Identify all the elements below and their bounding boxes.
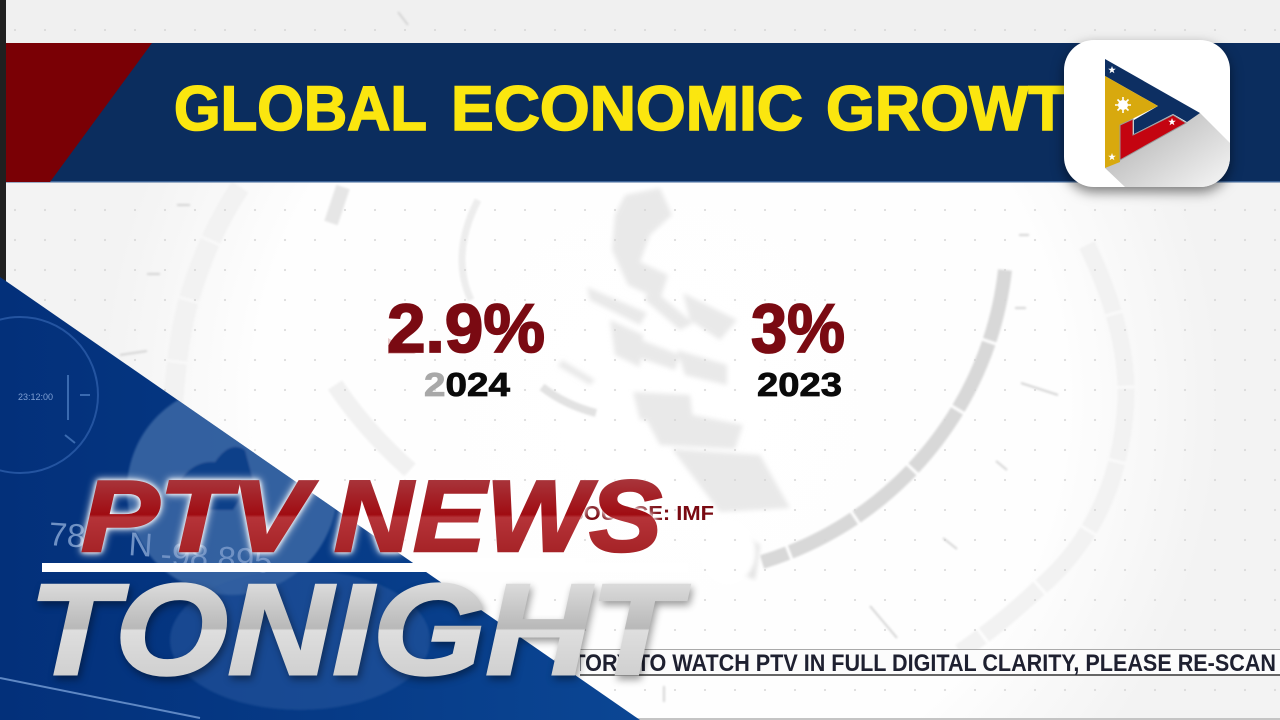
white island glow — [700, 520, 756, 584]
white rule — [42, 563, 688, 572]
stars — [1108, 66, 1176, 160]
PTV triangle emblem — [1105, 59, 1200, 168]
TONIGHT wordmark: TONIGHT — [29, 558, 689, 702]
data lines — [0, 678, 200, 718]
title banner — [6, 43, 1280, 182]
banner heading: ECONOMIC — [451, 74, 803, 144]
coordinates text: 78 — [48, 515, 87, 555]
coordinates text — [51, 522, 271, 572]
pink fade on digit — [388, 338, 416, 354]
PTV channel badge — [1064, 40, 1230, 187]
source credit: SOURCE: IMF — [569, 503, 714, 525]
stat: 2024 growth — [387, 290, 545, 403]
white patch — [415, 558, 585, 572]
PTV NEWS wordmark — [81, 461, 662, 573]
globe — [127, 385, 430, 710]
PTV NEWS wordmark: PTV — [81, 461, 318, 573]
year 2023: 2023 — [757, 366, 842, 403]
yellow shape — [1105, 76, 1158, 168]
stat: 2023 growth — [751, 290, 845, 403]
Philippines map — [558, 188, 790, 580]
PTV News Tonight logo — [29, 461, 689, 702]
red corner accent — [6, 43, 152, 182]
sun — [1115, 97, 1131, 113]
left edge strip — [0, 0, 6, 282]
navy shape — [1105, 59, 1200, 134]
value 3%: 3% — [751, 290, 845, 367]
PTV NEWS wordmark: NEWS — [334, 461, 662, 573]
year 2024: 2024 — [424, 366, 511, 403]
dial rings and ticks — [120, 12, 1126, 702]
blue corner panel — [0, 277, 640, 720]
HUD circle — [0, 317, 98, 473]
ticker bar — [558, 649, 1280, 677]
value 2.9%: 2.9% — [387, 290, 545, 367]
banner heading — [174, 74, 1112, 144]
coordinates text: -98 895 — [160, 535, 274, 580]
coordinates text: N — [128, 525, 154, 564]
red shape — [1120, 115, 1186, 160]
long shadow — [1105, 113, 1230, 187]
banner heading: GROWTH — [826, 74, 1112, 144]
banner heading: GLOBAL — [174, 74, 427, 144]
HUD clock text: 23:12:00 — [18, 392, 53, 402]
